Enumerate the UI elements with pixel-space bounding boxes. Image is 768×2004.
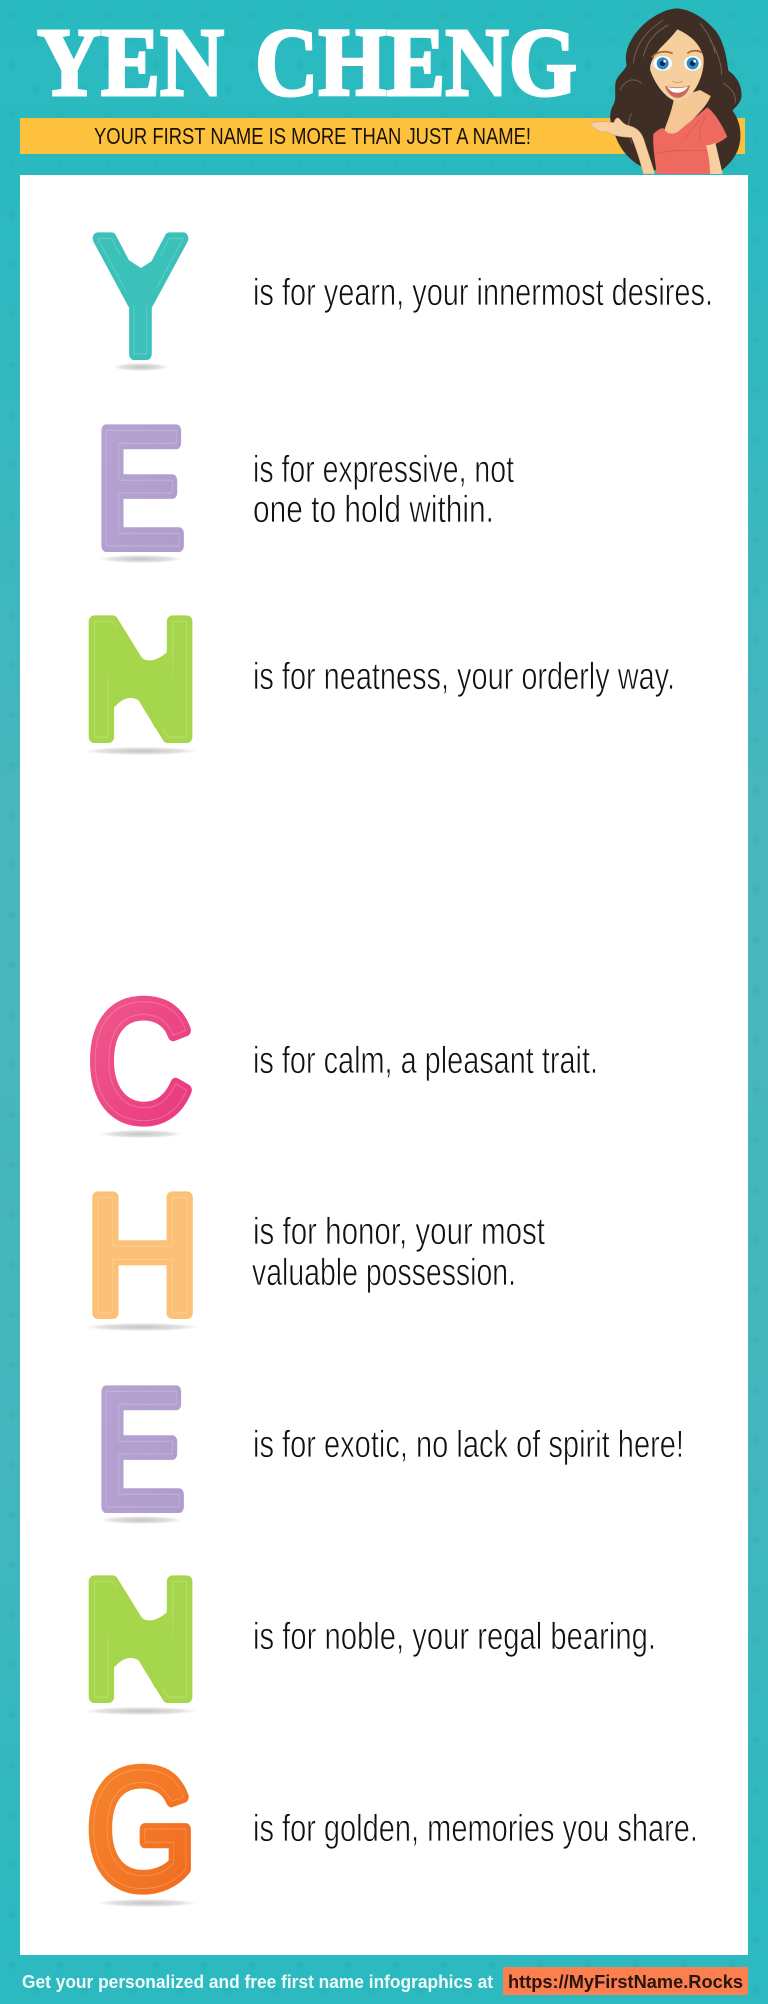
right arm: [706, 143, 723, 174]
right eye: [684, 56, 701, 71]
letter H: H: [85, 1161, 200, 1349]
letter N: N: [81, 585, 200, 773]
letter row: G: [87, 1735, 698, 1923]
text: C line: is for calm, a pleasant trait.: [253, 1040, 598, 1082]
footer url badge: [503, 1967, 748, 1995]
text: E lines: one to hold within.: [253, 489, 494, 531]
letter shadow: [83, 747, 199, 755]
banner tagline: YOUR FIRST NAME IS MORE THAN JUST A NAME!: [94, 123, 531, 149]
letter Y: Y: [95, 202, 186, 390]
letter G: G: [87, 1735, 196, 1923]
shirt folds: [657, 115, 707, 153]
letter row: E second: [95, 1356, 684, 1543]
letter row: C: [88, 968, 598, 1155]
letter shadow: [99, 555, 183, 563]
character: cartoon woman presenting: [590, 8, 742, 174]
smile: [665, 85, 690, 98]
banner: [20, 118, 745, 154]
letter N: N: [81, 1545, 200, 1733]
nose: [673, 81, 683, 82]
text: E lines: [253, 449, 514, 531]
hair back: [610, 8, 742, 171]
letter shadow: [84, 1323, 200, 1331]
letter shadow: [97, 1899, 197, 1907]
letter shadow: [99, 1130, 183, 1138]
title: CHENG: [255, 9, 577, 117]
letter row: Y: [95, 202, 713, 390]
footer url badge: https://MyFirstName.Rocks: [508, 1972, 743, 1992]
hair highlights: [620, 20, 735, 143]
letter shadow: [113, 363, 169, 371]
text: E lines: is for expressive, not: [253, 449, 514, 491]
letter E: E: [95, 1356, 185, 1543]
letter row: E: [95, 395, 514, 582]
text: H lines: is for honor, your most: [253, 1211, 545, 1253]
letter H: H: [85, 1161, 200, 1349]
letter shadow: [83, 1707, 199, 1715]
letter G: G: [87, 1735, 196, 1923]
face: [650, 29, 704, 101]
letter Y: Y: [95, 202, 186, 390]
letter E: E: [95, 395, 185, 582]
text: H lines: valuable possession.: [252, 1252, 516, 1294]
letter C: C: [88, 968, 192, 1155]
letter N: N: [81, 585, 200, 773]
text: N line: is for noble, your regal bearing.: [253, 1616, 656, 1658]
letter N: N: [81, 1545, 200, 1733]
footer: [22, 1967, 748, 1995]
letter E: E: [95, 1356, 185, 1543]
footer caption: Get your personalized and free first name infographics at: [22, 1972, 493, 1992]
neck and chest: [663, 90, 711, 134]
letter shadow: [99, 1516, 183, 1524]
left arm and hand: [590, 118, 655, 174]
letter C: C: [88, 968, 192, 1155]
letter E: E: [95, 395, 185, 582]
letter row: N second: [81, 1545, 656, 1733]
letter row: N: [81, 585, 675, 773]
eyebrows: [652, 51, 702, 57]
letter row: H: [84, 1161, 545, 1349]
text: H lines: [252, 1211, 545, 1294]
left eye: [653, 56, 672, 71]
title: [37, 9, 577, 117]
red shirt: [653, 107, 727, 174]
title: YEN: [37, 9, 224, 117]
